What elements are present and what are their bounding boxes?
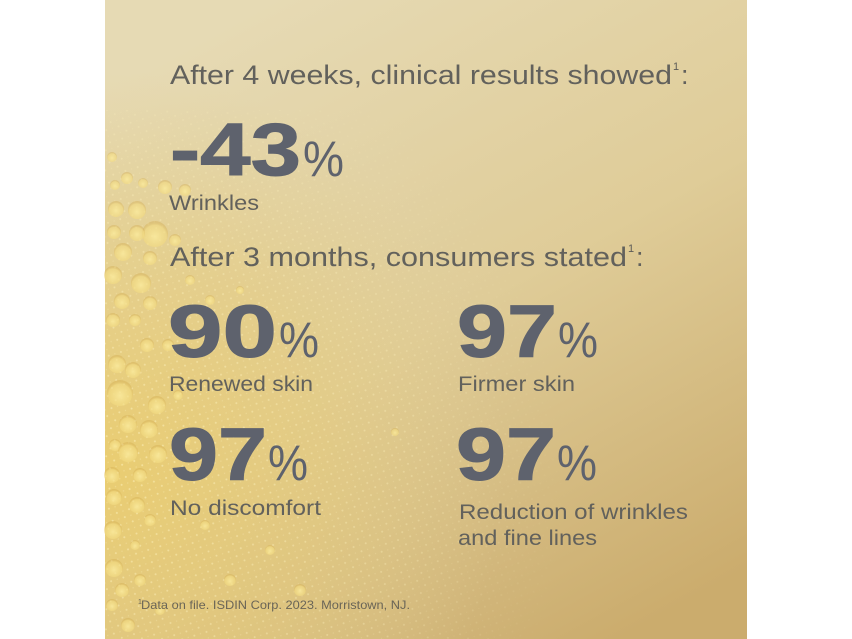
footnote: 1 [138,599,142,606]
stat: 97% reduction of wrinkles [456,413,688,550]
heading: after 3 months: After 3 months, consumers stated [170,242,627,272]
stat: 90% renewed skin [168,290,319,396]
stat: 90% renewed skin: % [279,312,319,368]
stat: 97% firmer skin: 97 [457,290,557,373]
footnote: Data on file. ISDIN Corp. 2023. Morristown, NJ. [141,598,410,612]
heading: after 4 weeks: : [681,60,689,90]
stat: 97% reduction of wrinkles: Reduction of wrinkles [459,500,688,524]
stat: 97% reduction of wrinkles: 97 [456,413,556,496]
bubbles on left edge [104,152,399,632]
stat: 97% no discomfort [169,413,321,520]
stat: -43% wrinkles [169,108,344,215]
stat: 97% no discomfort: % [268,435,308,491]
heading: after 3 months: : [636,242,644,272]
stat: 97% reduction of wrinkles: % [557,435,597,491]
stat: 97% firmer skin: % [558,312,598,368]
heading: after 4 weeks: After 4 weeks, clinical results showed [170,60,672,90]
stat: 97% no discomfort: No discomfort [170,496,321,520]
stat: 97% firmer skin: Firmer skin [458,372,575,396]
stat: 90% renewed skin: 90 [168,290,277,373]
stat: 97% no discomfort: 97 [169,413,267,496]
stat: 90% renewed skin: Renewed skin [169,372,313,396]
panel: gold background [105,0,747,639]
heading: after 3 months: 1 [628,243,634,255]
stat: -43% wrinkles: % [303,131,344,187]
stat: 97% firmer skin [457,290,598,396]
stat: -43% wrinkles: -43 [170,108,301,191]
stat: 97% reduction of wrinkles: and fine lines [458,526,597,550]
stat: -43% wrinkles: Wrinkles [169,191,259,215]
heading: after 4 weeks: 1 [673,61,679,73]
